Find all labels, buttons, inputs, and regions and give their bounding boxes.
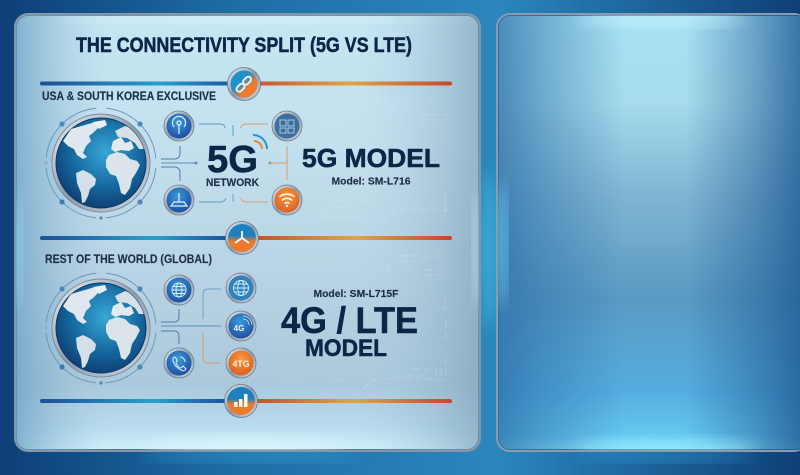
label: 5G model (302, 143, 440, 188)
title: THE CONNECTIVITY SPLIT (5G VS LTE) (76, 34, 412, 57)
label: 4G LTE model: 4G / LTE (281, 300, 418, 341)
heading: USA and South Korea: USA & SOUTH KOREA EXCLUSIVE (42, 91, 216, 103)
divider: middle (40, 222, 452, 254)
icon: network node (164, 185, 194, 215)
panel: connectivity split (12, 13, 483, 455)
label: 5G network: NETWORK (206, 177, 259, 189)
icon: circuit grid (272, 111, 302, 141)
label: 4G LTE model: MODEL (305, 335, 387, 362)
icon: globe 5G (44, 108, 156, 220)
icon: node branches (235, 231, 249, 243)
icon: bar signal (234, 394, 248, 407)
icon: 4TG (226, 348, 256, 378)
icon: 4G: 4G (234, 324, 244, 333)
panel: empty right (496, 12, 800, 455)
heading: rest of the world: REST OF THE WORLD (GLOBAL) (45, 254, 212, 266)
icon: signal arcs (253, 135, 267, 149)
connectors: 5G (161, 124, 287, 202)
label: 5G network: 5G (207, 139, 258, 181)
faint HUD details: bottom (285, 255, 448, 389)
icon: globe small left (164, 275, 194, 305)
icon: phone (164, 348, 194, 378)
label: 5G network (206, 135, 267, 189)
label: 4G LTE model: Model: SM-L715F (314, 288, 399, 300)
icon: antenna (164, 111, 194, 141)
icon: chain link (235, 76, 252, 93)
icon: globe small right (226, 273, 256, 303)
faint HUD details: top (317, 99, 450, 222)
connectors: global (161, 289, 221, 363)
divider: bottom (40, 384, 452, 418)
label: 5G model: 5G MODEL (302, 143, 440, 173)
icon: wifi (272, 185, 302, 215)
label: 4G LTE model (281, 288, 418, 362)
icon: 4G (226, 311, 256, 341)
icon: globe global (44, 273, 156, 385)
label: 5G model: Model: SM-L716 (332, 176, 411, 188)
icon: 4TG: 4TG (232, 359, 250, 369)
divider: top (40, 68, 452, 100)
